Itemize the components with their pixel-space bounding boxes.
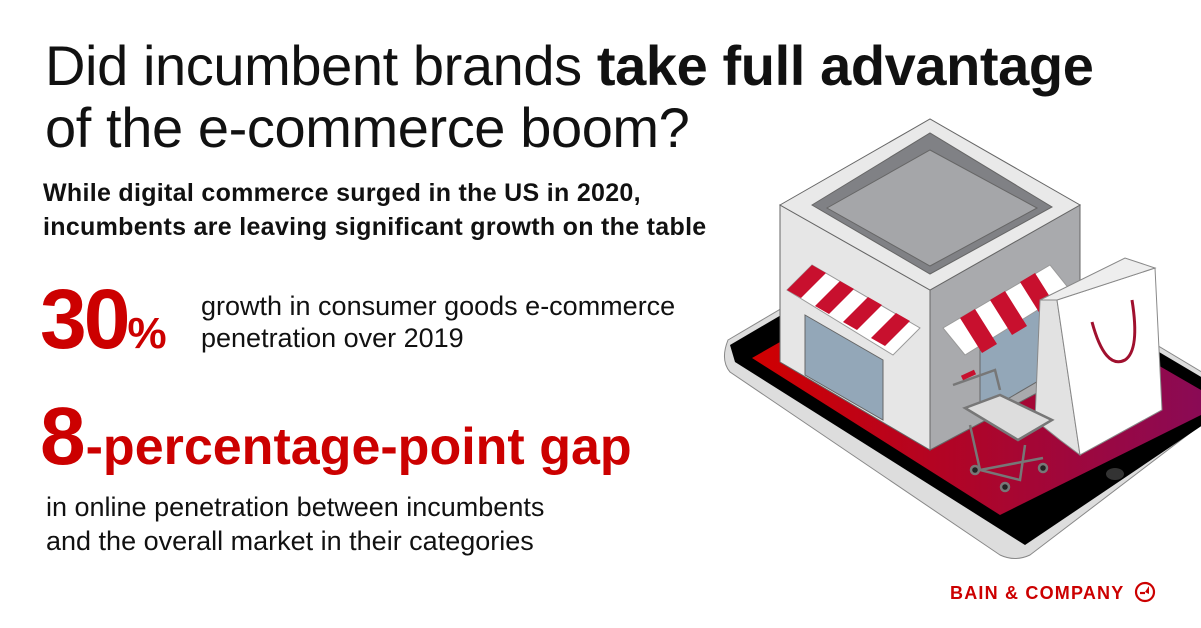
subtitle: While digital commerce surged in the US in 2020, xyxy=(43,179,641,207)
stat 30% description: growth in consumer goods e-commerce xyxy=(201,291,675,321)
shopping bag xyxy=(1035,258,1162,455)
awnings xyxy=(787,265,1070,355)
subtitle xyxy=(43,179,707,241)
logo: Bain & Company: BAIN & COMPANY xyxy=(950,583,1124,603)
stat gap description: in online penetration between incumbents xyxy=(46,492,544,522)
title xyxy=(45,34,1093,159)
stat: 8-percentage-point gap: 8-percentage-point gap xyxy=(40,391,632,482)
building xyxy=(780,119,1080,450)
stat 30% description xyxy=(201,291,675,353)
stat 30% description: penetration over 2019 xyxy=(201,323,464,353)
stat: 30%: 30% xyxy=(40,272,167,366)
title: Did incumbent brands take full advantage xyxy=(45,34,1093,97)
tablet xyxy=(724,215,1201,558)
shopping cart xyxy=(953,370,1052,491)
subtitle: incumbents are leaving significant growth on the table xyxy=(43,213,707,241)
stat gap description: and the overall market in their categories xyxy=(46,526,534,556)
stat gap description xyxy=(46,492,544,556)
title: of the e-commerce boom? xyxy=(45,96,689,159)
